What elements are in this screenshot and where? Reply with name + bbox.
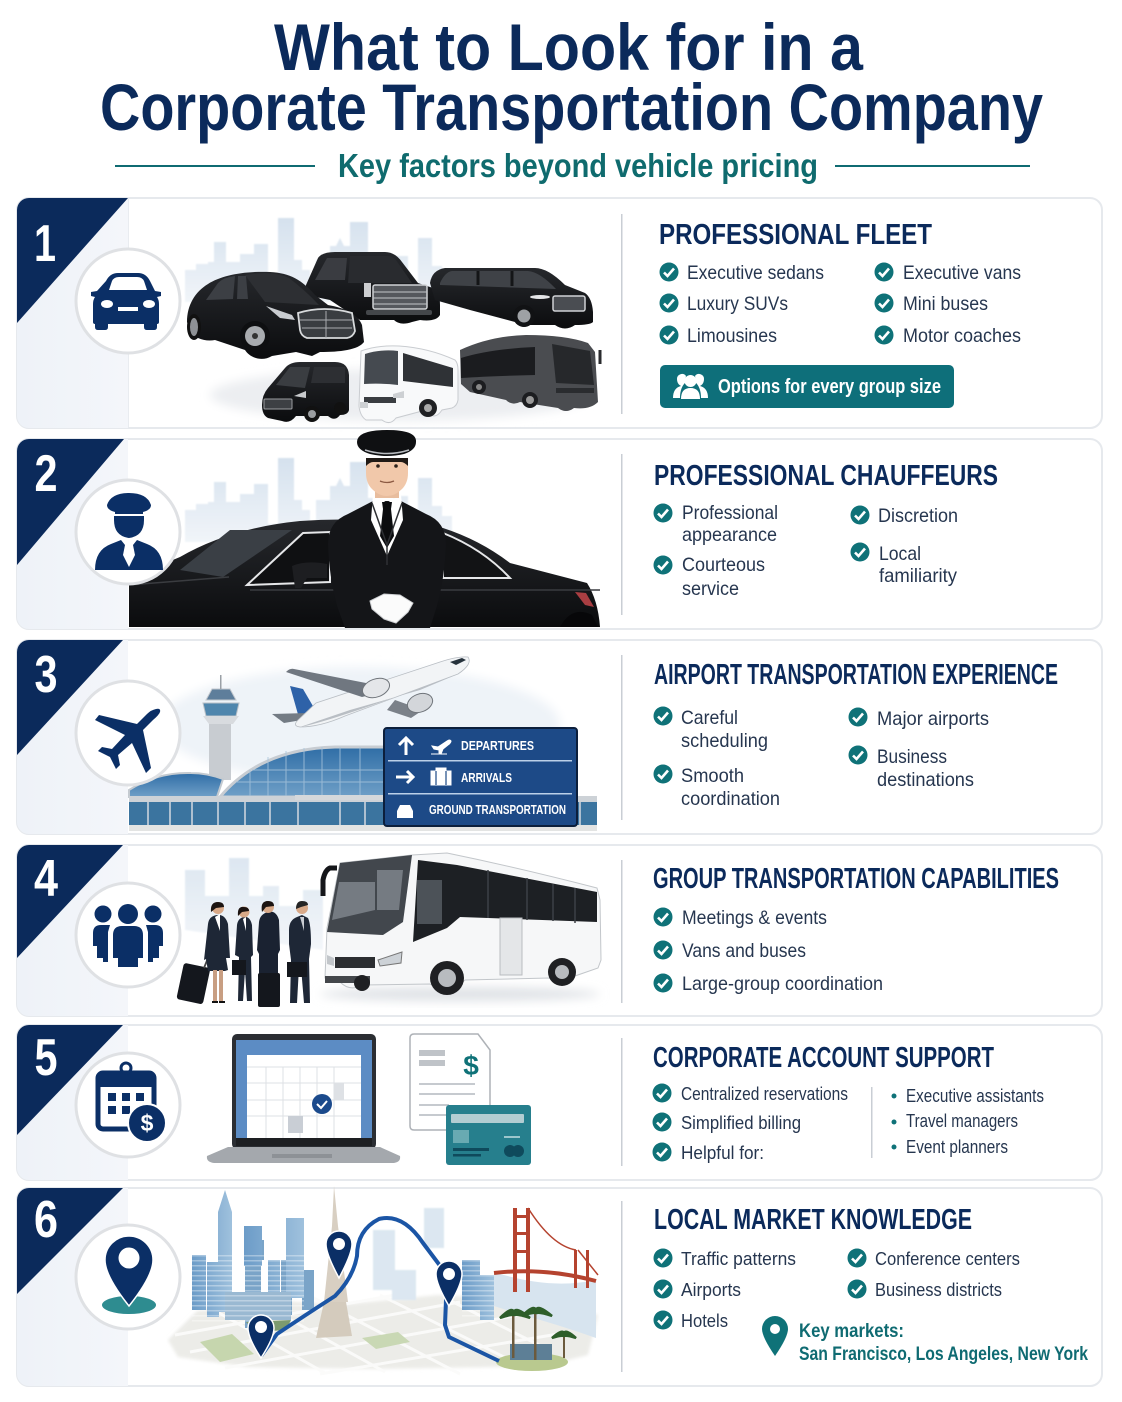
- feature list: Executive vans: [903, 262, 1021, 284]
- number badge 6: 6: [34, 1191, 58, 1249]
- panel: professional fleet: [17, 198, 1102, 428]
- number badge 1: 1: [34, 215, 56, 273]
- feature list: Business districts: [875, 1280, 1002, 1300]
- feature list: Luxury SUVs: [687, 293, 788, 315]
- feature list: Large-group coordination: [682, 973, 883, 995]
- feature list: Smooth: [681, 765, 744, 787]
- feature list: Vans and buses: [682, 940, 806, 962]
- feature list: [654, 502, 958, 600]
- feature list: Mini buses: [903, 293, 988, 315]
- callout: key markets: Key markets:: [799, 1321, 904, 1342]
- illustration: city map and route: [168, 1186, 598, 1374]
- number badge 5: 5: [34, 1029, 58, 1087]
- feature list: destinations: [877, 769, 974, 791]
- feature list: Careful: [681, 707, 738, 729]
- street map: [168, 1295, 598, 1374]
- white coach bus: [323, 853, 601, 995]
- feature list: Hotels: [681, 1311, 728, 1331]
- panel: corporate account: [17, 1025, 1102, 1180]
- illustration: laptop with calendar: [207, 1034, 400, 1163]
- icon: airplane: [76, 681, 180, 785]
- feature list: Helpful for:: [681, 1143, 764, 1163]
- icon: calendar billing: [76, 1053, 180, 1157]
- illustration: invoice and card: $: [463, 1050, 479, 1081]
- illustration: chauffeur and car: [129, 430, 600, 628]
- icon: calendar billing: $: [141, 1110, 154, 1136]
- callout: group size: Options for every group size: [718, 376, 941, 398]
- icon: chauffeur: [76, 480, 180, 584]
- icon: car: [76, 249, 180, 353]
- feature list: Centralized reservations: [681, 1084, 848, 1104]
- feature list: Courteous: [682, 554, 765, 576]
- panel: group transportation: [17, 845, 1102, 1016]
- heading: PROFESSIONAL FLEET: [659, 219, 932, 251]
- illustration: invoice and card: [410, 1034, 531, 1165]
- panel: local market knowledge: [17, 1186, 1102, 1386]
- golden gate bridge: [494, 1208, 598, 1338]
- suv: [306, 252, 440, 324]
- airport sign: [384, 728, 577, 826]
- feature list: familiarity: [879, 565, 957, 587]
- airplane: [272, 657, 469, 727]
- feature list: [654, 907, 883, 995]
- title: What to Look for in a: [274, 10, 864, 84]
- feature list: Meetings & events: [682, 907, 827, 929]
- feature list: Executive sedans: [687, 262, 824, 284]
- helpful-for list: Executive assistants: [906, 1086, 1044, 1106]
- feature list: Limousines: [687, 325, 777, 347]
- feature list: Simplified billing: [681, 1113, 801, 1133]
- heading: LOCAL MARKET KNOWLEDGE: [654, 1204, 972, 1236]
- illustration: group and bus: [176, 853, 601, 1007]
- number badge 6: [17, 1188, 123, 1294]
- feature list: Business: [877, 746, 947, 768]
- van: [262, 362, 349, 422]
- subtitle: Key factors beyond vehicle pricing: [338, 147, 818, 184]
- route line: [261, 1218, 499, 1361]
- panel: airport transportation: [17, 640, 1102, 834]
- feature list: Professional: [682, 502, 778, 524]
- coach: [460, 335, 600, 411]
- control tower: [203, 675, 239, 780]
- white bus: [359, 346, 458, 423]
- feature list: [654, 706, 989, 810]
- feature list: Traffic patterns: [681, 1249, 796, 1269]
- number badge 4: 4: [34, 850, 58, 908]
- terminal: [129, 747, 597, 831]
- airport sign: DEPARTURES: [461, 738, 534, 753]
- feature list: service: [682, 578, 739, 600]
- icon: location pin: [76, 1225, 180, 1329]
- map pins: [248, 1231, 462, 1358]
- airport sign: GROUND TRANSPORTATION: [429, 802, 566, 817]
- callout: key markets: [762, 1316, 1088, 1365]
- number badge 2: 2: [34, 445, 58, 503]
- feature list: Motor coaches: [903, 325, 1021, 347]
- helpful-for list: Event planners: [906, 1137, 1008, 1157]
- sedan: [187, 272, 364, 359]
- heading: PROFESSIONAL CHAUFFEURS: [654, 460, 998, 492]
- number badge 2: [17, 439, 124, 565]
- number badge 3: 3: [34, 646, 58, 704]
- feature list: appearance: [682, 524, 777, 546]
- chauffeur: [328, 430, 446, 628]
- feature list: [654, 1248, 1020, 1331]
- illustration: airport: [129, 657, 597, 831]
- helpful-for list: [892, 1086, 1044, 1157]
- icon: group: [76, 883, 180, 987]
- number badge 1: [17, 198, 128, 323]
- limousine: [430, 268, 593, 328]
- skyline buildings: [192, 1186, 494, 1338]
- feature list: Local: [879, 543, 921, 565]
- feature list: Airports: [681, 1280, 741, 1300]
- title: [100, 10, 1043, 144]
- helpful-for list: Travel managers: [906, 1111, 1018, 1131]
- number badge 5: [17, 1025, 123, 1135]
- travellers: [176, 901, 311, 1007]
- black sedan: [129, 520, 600, 627]
- airport sign: ARRIVALS: [461, 770, 512, 785]
- feature list: scheduling: [681, 730, 768, 752]
- number badge 3: [17, 640, 123, 755]
- feature list: Conference centers: [875, 1249, 1020, 1269]
- feature list: coordination: [681, 788, 780, 810]
- heading: CORPORATE ACCOUNT SUPPORT: [653, 1042, 994, 1074]
- feature list: [652, 1084, 848, 1163]
- panel: professional chauffeurs: [17, 430, 1102, 629]
- feature list: Major airports: [877, 708, 989, 730]
- callout: group size: [660, 365, 954, 408]
- palm trees: [496, 1308, 576, 1371]
- number badge 4: [17, 845, 123, 958]
- feature list: Discretion: [878, 505, 958, 527]
- feature list: [660, 262, 1021, 347]
- illustration: fleet: [185, 218, 600, 423]
